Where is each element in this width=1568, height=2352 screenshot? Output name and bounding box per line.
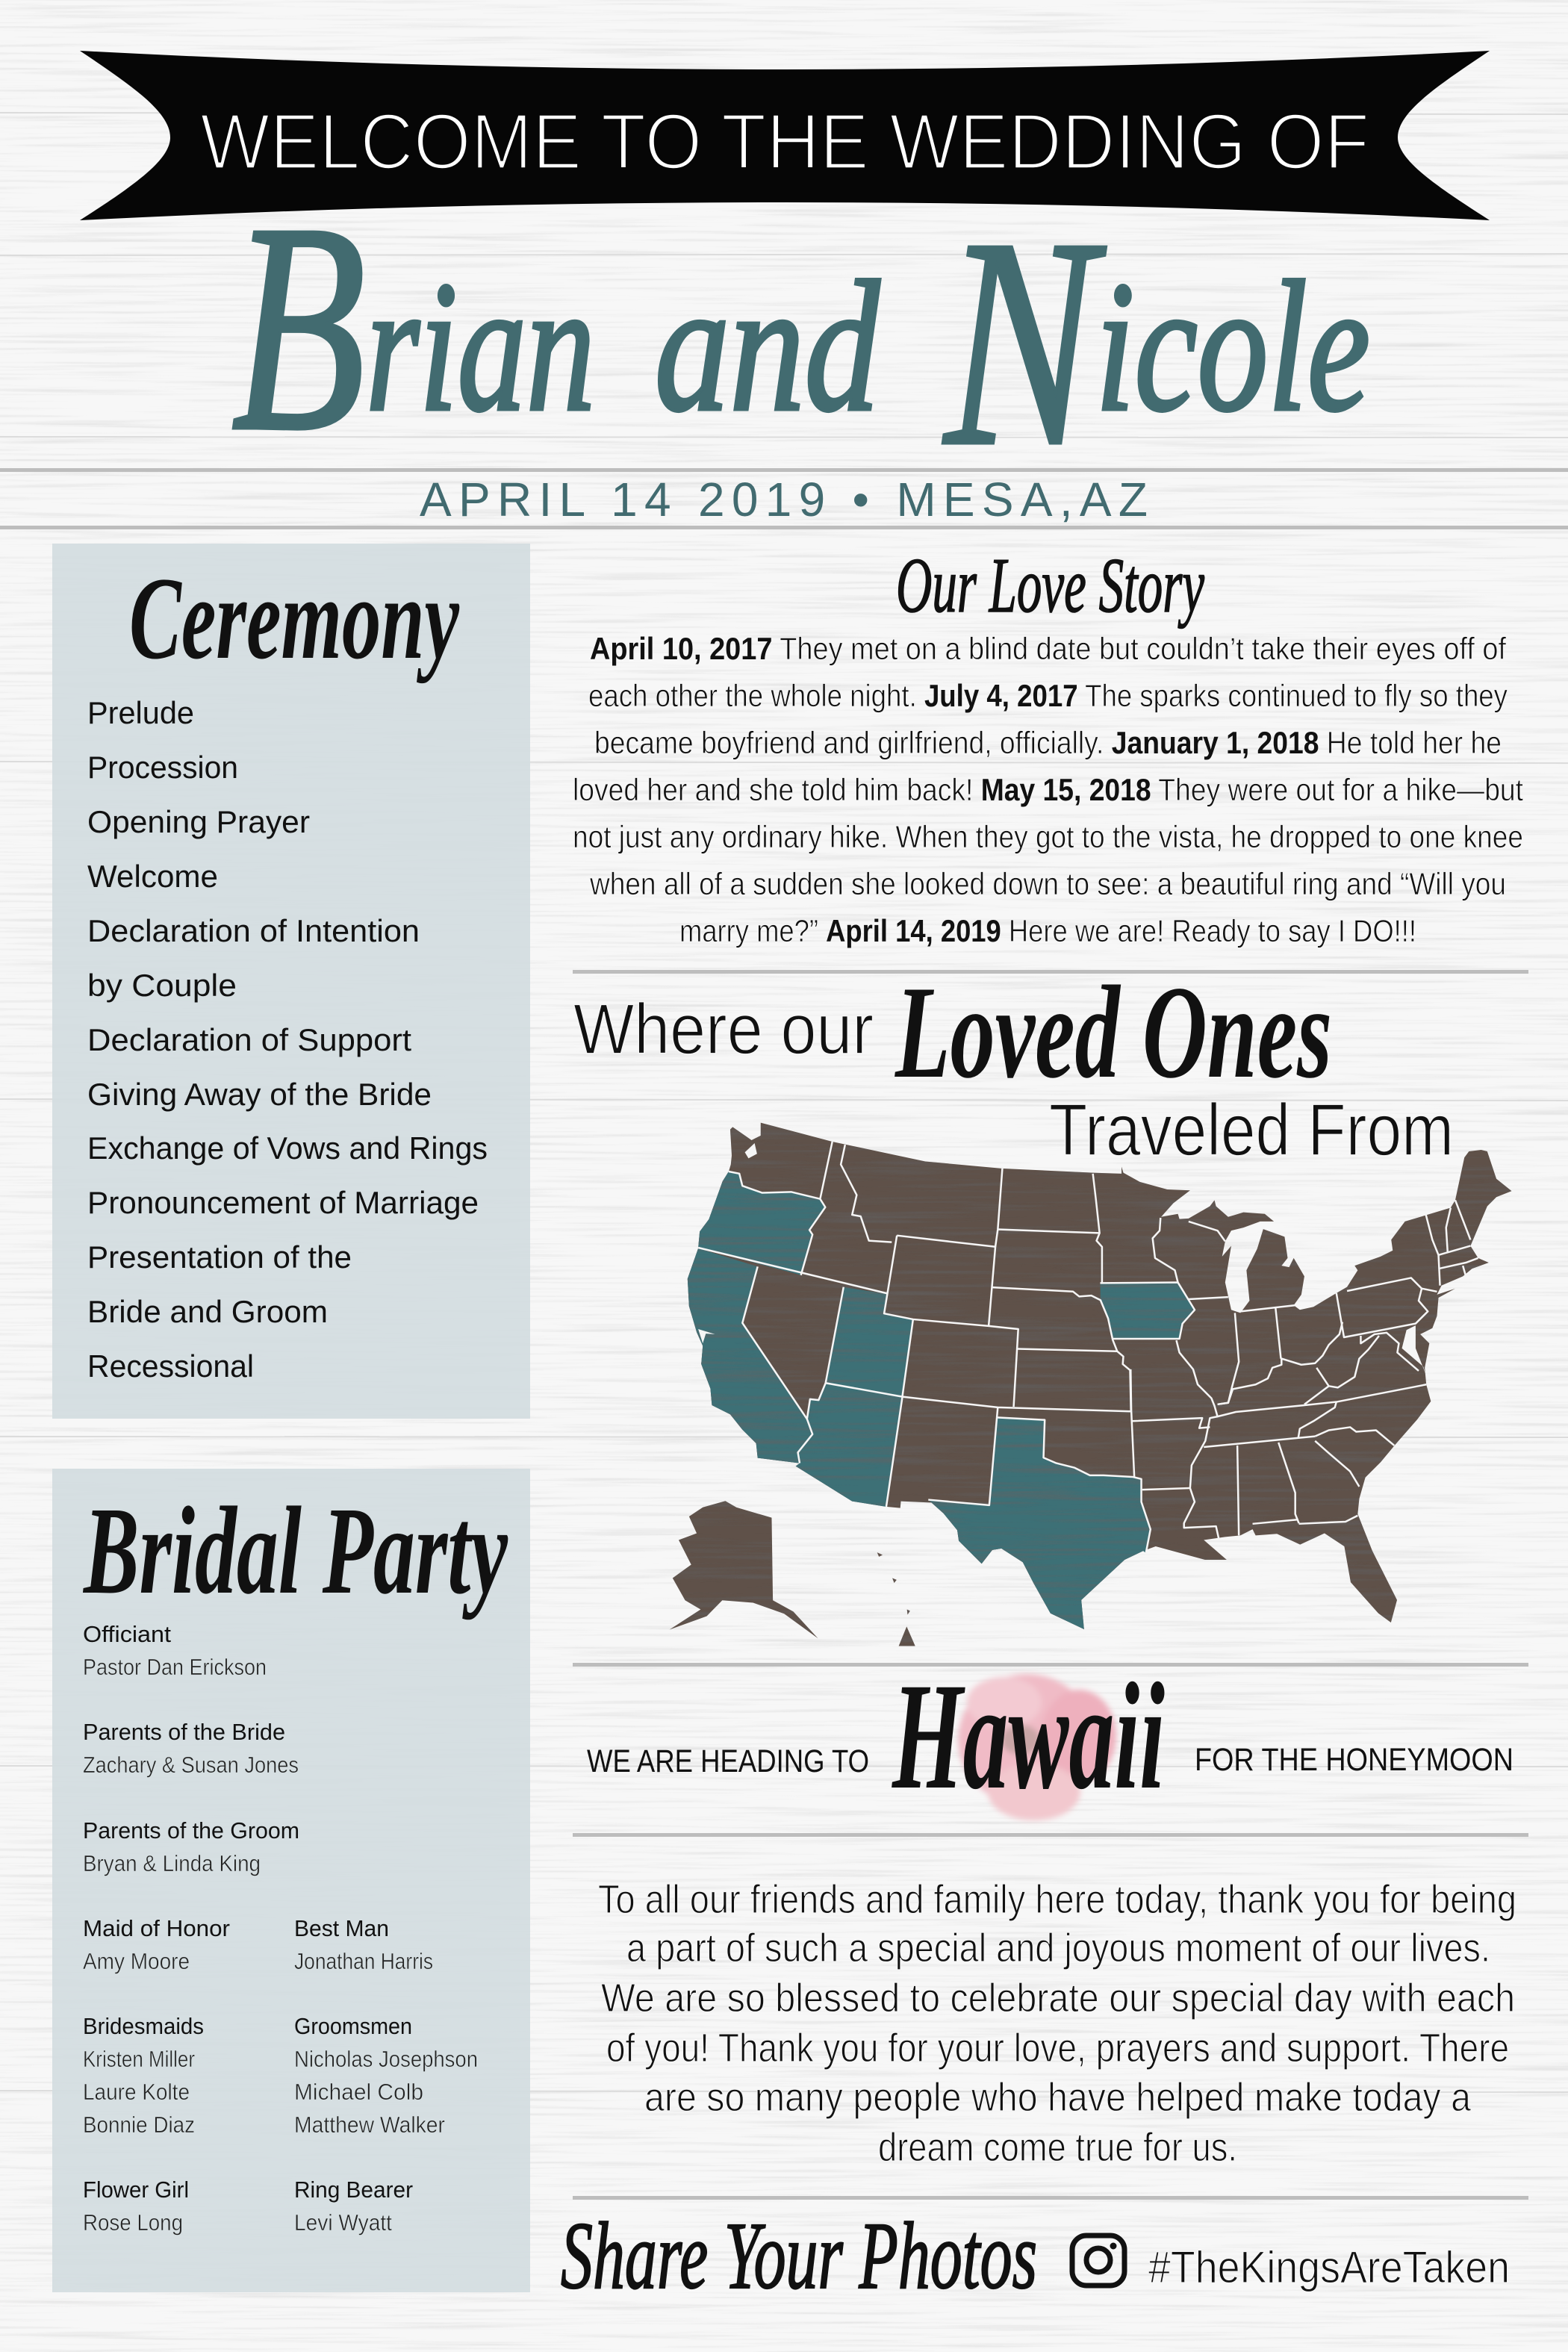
section: honeymoon xyxy=(587,1652,1513,1821)
title: couple names: B xyxy=(231,162,366,493)
love story paragraph: April 10, 2017 They met on a blind date but couldn’t take their eyes off of xyxy=(590,631,1506,666)
parents of the bride: Parents of the Bride xyxy=(83,1719,285,1745)
ring bearer: Ring Bearer xyxy=(294,2177,413,2203)
map: white bays and sounds xyxy=(698,1143,1426,1375)
officiant: Pastor Dan Erickson xyxy=(83,1654,267,1680)
bridesmaids: Kristen Miller xyxy=(83,2046,195,2072)
love story paragraph: marry me?” April 14, 2019 Here we are! Ready to say I DO!!! xyxy=(679,913,1416,948)
heading: ceremony: Ceremony xyxy=(129,553,460,684)
ceremony program list: Bride and Groom xyxy=(87,1294,328,1329)
thank you message xyxy=(598,1877,1516,2170)
heading: bridal party: Bridal Party xyxy=(83,1481,508,1620)
thank you message: dream come true for us. xyxy=(878,2125,1237,2170)
honeymoon text left: WE ARE HEADING TO xyxy=(587,1743,869,1779)
honeymoon text right: FOR THE HONEYMOON xyxy=(1195,1742,1513,1778)
ribbon banner xyxy=(80,51,1490,220)
ceremony program list: Prelude xyxy=(87,695,194,730)
officiant: Officiant xyxy=(83,1621,171,1647)
ring bearer: Levi Wyatt xyxy=(294,2209,392,2236)
hawaii script word: Hawaii xyxy=(892,1652,1165,1821)
best man: Jonathan Harris xyxy=(294,1948,433,1974)
love story paragraph: became boyfriend and girlfriend, officially. January 1, 2018 He told her he xyxy=(594,725,1502,760)
love story paragraph xyxy=(573,631,1523,948)
panel: bridal party xyxy=(52,1469,530,2292)
maid of honor: Maid of Honor xyxy=(83,1915,230,1941)
love story paragraph: loved her and she told him back! May 15, 2018 They were out for a hike—but xyxy=(573,772,1523,807)
ceremony program list: Giving Away of the Bride xyxy=(87,1077,432,1112)
ceremony program list: Declaration of Intention xyxy=(87,913,420,948)
groomsmen: Nicholas Josephson xyxy=(294,2046,478,2072)
heading: where our loved ones traveled from xyxy=(573,958,1454,1171)
groomsmen: Groomsmen xyxy=(294,2013,412,2039)
heading: where our loved ones traveled from: Loved Ones xyxy=(895,958,1332,1106)
parents of the bride xyxy=(83,1719,299,1778)
parents of the groom: Parents of the Groom xyxy=(83,1817,299,1844)
best man xyxy=(294,1915,433,1974)
ceremony program list: Declaration of Support xyxy=(87,1022,411,1057)
title: couple names xyxy=(231,162,1370,508)
love story paragraph: each other the whole night. July 4, 2017 The sparks continued to fly so they xyxy=(588,678,1508,713)
groomsmen: Michael Colb xyxy=(294,2079,423,2105)
groomsmen: Matthew Walker xyxy=(294,2112,445,2138)
heading: where our loved ones traveled from: Traveled From xyxy=(1049,1089,1454,1171)
hashtag: #TheKingsAreTaken xyxy=(1148,2242,1510,2292)
icon: instagram xyxy=(1072,2236,1124,2286)
best man: Best Man xyxy=(294,1915,389,1941)
ceremony program list xyxy=(87,695,488,1384)
parents of the bride: Zachary & Susan Jones xyxy=(83,1752,299,1778)
watercolor pink flower xyxy=(958,1674,1116,1820)
ceremony program list: Pronouncement of Marriage xyxy=(87,1185,479,1220)
ring bearer xyxy=(294,2177,413,2236)
ceremony program list: by Couple xyxy=(87,968,237,1003)
heading: where our loved ones traveled from: Where our xyxy=(573,989,874,1069)
title: couple names: and xyxy=(655,243,880,450)
title: couple names: icole xyxy=(1095,243,1370,450)
thank you message: are so many people who have helped make today a xyxy=(644,2075,1472,2120)
maid of honor: Amy Moore xyxy=(83,1948,190,1974)
ceremony program list: Opening Prayer xyxy=(87,804,310,839)
map: highlighted teal states xyxy=(688,1172,1195,1629)
flower girl: Flower Girl xyxy=(83,2177,189,2203)
ceremony program list: Recessional xyxy=(87,1348,254,1384)
groomsmen xyxy=(294,2013,478,2138)
officiant xyxy=(83,1621,267,1680)
ceremony program list: Welcome xyxy=(87,859,218,894)
heading: share your photos: Share Your Photos xyxy=(561,2203,1037,2309)
title: couple names: rian xyxy=(366,243,595,450)
heading: our love story: Our Love Story xyxy=(896,541,1204,629)
parents of the groom: Bryan & Linda King xyxy=(83,1850,261,1876)
flower girl: Rose Long xyxy=(83,2209,183,2236)
panel: ceremony xyxy=(52,544,530,1419)
title: couple names: N xyxy=(941,177,1107,508)
bridesmaids: Bridesmaids xyxy=(83,2013,204,2039)
ceremony program list: Presentation of the xyxy=(87,1239,352,1275)
ceremony program list: Procession xyxy=(87,750,238,785)
maid of honor xyxy=(83,1915,230,1974)
map: united states with visited states highlighted xyxy=(670,1123,1511,1646)
map: brown base states xyxy=(670,1123,1511,1646)
section: share your photos xyxy=(561,2203,1510,2309)
ribbon banner: WELCOME TO THE WEDDING OF xyxy=(200,98,1369,186)
section: our love story xyxy=(573,541,1523,948)
parents of the groom xyxy=(83,1817,299,1876)
bridesmaids xyxy=(83,2013,204,2138)
flower girl xyxy=(83,2177,189,2236)
map: white state borders xyxy=(698,1142,1478,1553)
date and location: APRIL 14 2019 • MESA,AZ xyxy=(420,473,1148,526)
ceremony program list: Exchange of Vows and Rings xyxy=(87,1130,488,1166)
bridesmaids: Bonnie Diaz xyxy=(83,2112,195,2138)
bridesmaids: Laure Kolte xyxy=(83,2079,190,2105)
